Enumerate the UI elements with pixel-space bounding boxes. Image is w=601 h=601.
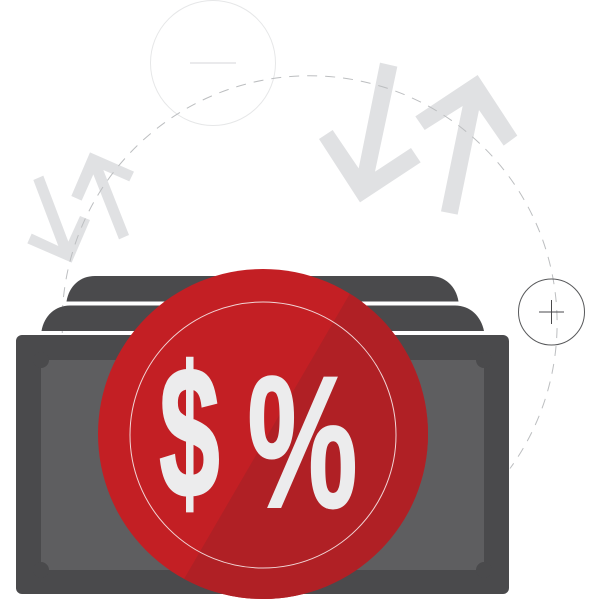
icon: minus circle: [150, 0, 276, 126]
badge shaded wedge: [184, 294, 428, 599]
middle banknote: [42, 306, 484, 331]
dollar sign: $: [159, 329, 220, 537]
back banknote: [66, 276, 458, 302]
front banknote: [16, 335, 509, 594]
arrows: large down and up pair: [319, 63, 517, 215]
dashed orbit arc: [62, 76, 557, 468]
banknote stack: [16, 276, 509, 594]
arrows: small down and up pair: [27, 152, 134, 263]
badge inner ring: [130, 302, 396, 568]
red badge: [98, 269, 440, 601]
icon: plus circle: [518, 279, 584, 345]
percent sign: %: [247, 337, 358, 547]
